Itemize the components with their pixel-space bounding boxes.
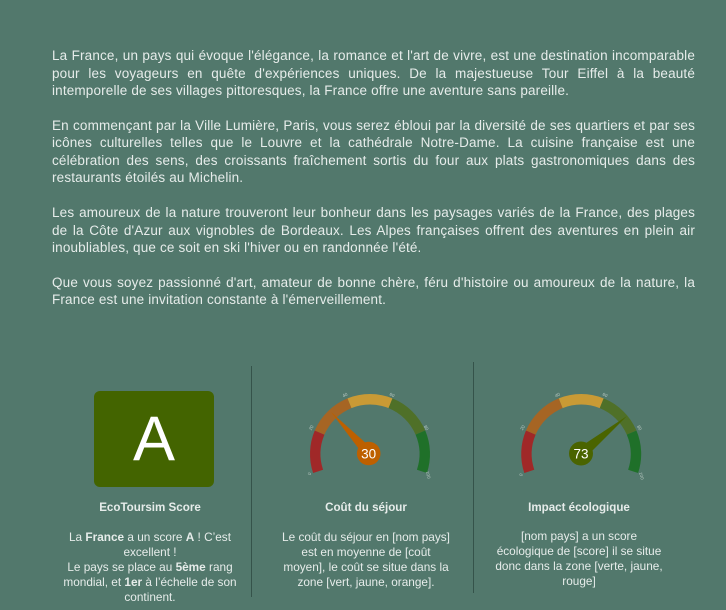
score description <box>63 530 237 604</box>
panel: cost gauge <box>282 391 450 589</box>
paragraph 3: inoubliables, que ce soit en ski l'hiver ou en randonnée l'été. <box>52 240 421 255</box>
paragraph 2: icônes culturelles telles que le Louvre et la cathédrale Notre-Dame. La cuisine française est une <box>52 135 695 150</box>
score description: continent. <box>124 590 176 604</box>
paragraph 2: restaurants étoilés au Michelin. <box>52 170 243 185</box>
impact description: rouge] <box>562 574 596 588</box>
score description: excellent ! <box>123 545 177 559</box>
gauge: impact 73: 40 <box>554 391 561 398</box>
heading: Impact écologique: Impact écologique <box>528 501 630 514</box>
gauge: impact 73: 100 <box>638 472 645 481</box>
gauge: impact 73: 80 <box>636 424 643 432</box>
cost description: moyen], le coût se situe dans la <box>283 560 449 574</box>
gauge: impact 73: 20 <box>519 424 526 431</box>
score description: Le pays se place au 5ème rang <box>67 560 233 574</box>
cost description <box>282 530 450 589</box>
impact description: [nom pays] a un score <box>521 529 637 543</box>
cost description: zone [vert, jaune, orange]. <box>297 575 435 589</box>
impact description <box>495 529 663 588</box>
gauge: cost 30 <box>307 391 432 480</box>
paragraph 3: Les amoureux de la nature trouveront leur bonheur dans les paysages variés de la France, des plages <box>52 205 695 220</box>
heading: Coût du séjour: Coût du séjour <box>325 501 407 514</box>
paragraph 2: En commençant par la Ville Lumière, Paris, vous serez ébloui par la diversité de ses quartiers et par ses <box>52 118 695 133</box>
impact description: donc dans la zone [verte, jaune, <box>495 559 663 573</box>
paragraph 1: La France, un pays qui évoque l'élégance, la romance et l'art de vivre, est une destination incomparable <box>52 48 695 63</box>
paragraph 4: Que vous soyez passionné d'art, amateur de bonne chère, féru d'histoire ou amoureux de la nature, la <box>52 275 695 290</box>
gauge: impact 73 <box>518 391 645 481</box>
intro text <box>52 48 695 307</box>
paragraph 2 <box>52 118 695 185</box>
gauge: cost 30: 60 <box>389 392 396 399</box>
gauge: impact 73: 0 <box>518 472 524 477</box>
panel: ecological impact gauge <box>495 391 663 588</box>
score description: mondial, et 1er à l’échelle de son <box>63 575 237 589</box>
panel: EcoTourism score <box>63 391 237 604</box>
paragraph 1: pour les voyageurs en quête d'expériences uniques. De la majestueuse Tour Eiffel à la beauté <box>52 66 695 81</box>
paragraph 4: France est une invitation constante à l'émerveillement. <box>52 292 386 307</box>
paragraph 4 <box>52 275 695 307</box>
gauge: cost 30: 40 <box>342 391 349 398</box>
cost description: est en moyenne de [coût <box>301 545 431 559</box>
paragraph 1 <box>52 48 695 98</box>
paragraph 3: de la Côte d'Azur aux vignobles de Bordeaux. Les Alpes françaises offrent des aventures en plein air <box>52 223 695 238</box>
gauge: impact 73: 60 <box>602 392 609 399</box>
paragraph 3 <box>52 205 695 255</box>
gauge: cost 30: 30 <box>361 446 376 462</box>
gauge: cost 30: 20 <box>308 424 315 431</box>
paragraph 2: célébration des sens, des croissants fraîchement sortis du four aux plats gastronomiques dans des <box>52 153 695 168</box>
gauge: impact 73: 73 <box>573 446 589 462</box>
gauge: cost 30: 100 <box>425 471 432 480</box>
score badge A <box>94 391 214 487</box>
score badge A: A <box>133 404 175 474</box>
impact description: écologique de [score] il se situe <box>497 544 661 558</box>
score description: La France a un score A ! C’est <box>69 530 231 544</box>
heading: EcoToursim Score: EcoToursim Score <box>99 501 201 514</box>
gauge: cost 30: 0 <box>307 471 312 476</box>
cost description: Le coût du séjour en [nom pays] <box>282 530 450 544</box>
paragraph 1: intemporelle de ses villages pittoresques, la France offre une aventure sans pareille. <box>52 83 569 98</box>
gauge: cost 30: 80 <box>423 424 430 432</box>
